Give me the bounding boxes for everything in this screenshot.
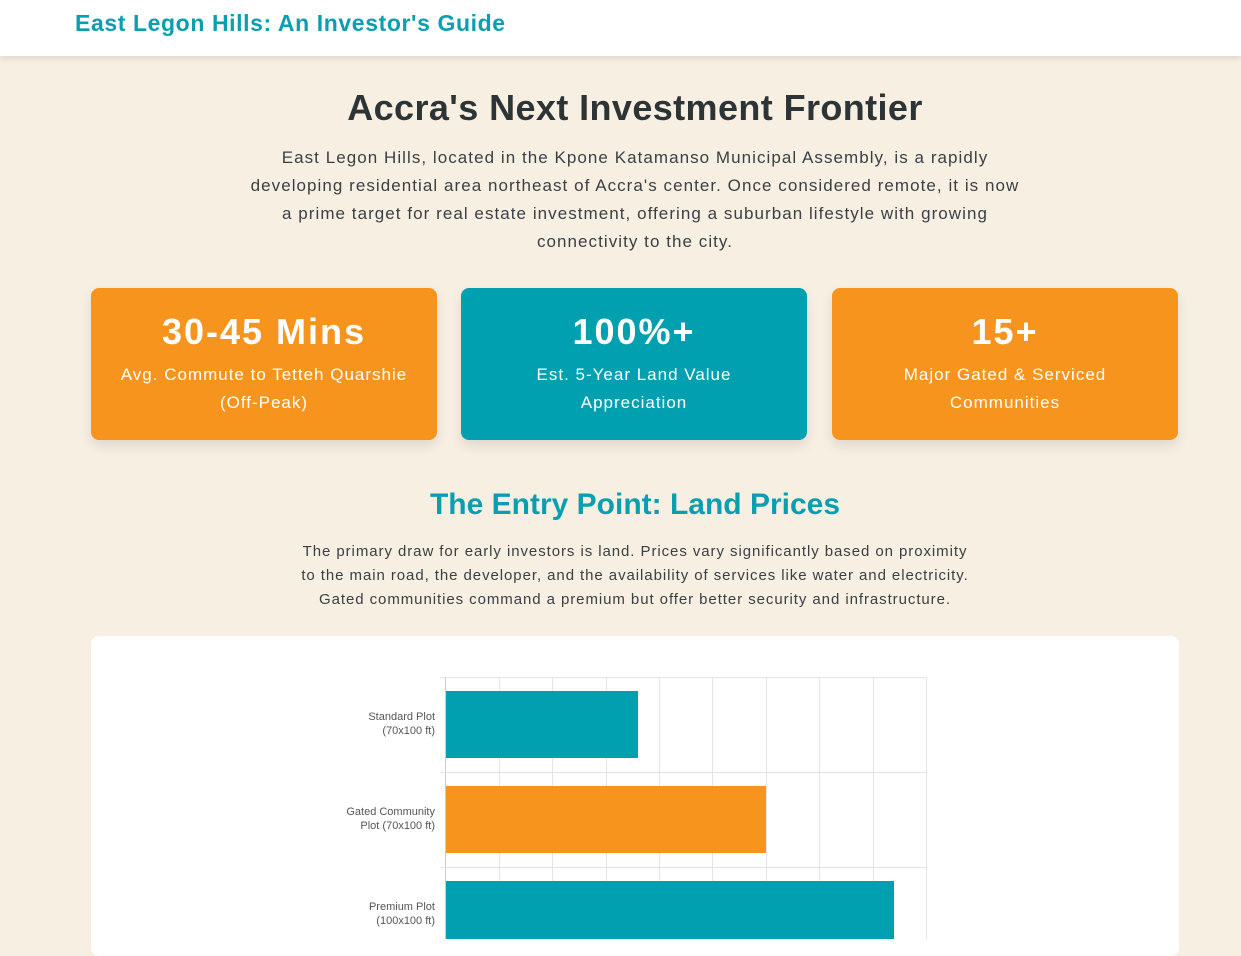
label: gated xyxy=(346,806,435,832)
section text: to the main road, the developer, and the availability of services like water and electricity. xyxy=(301,567,969,584)
label: standard xyxy=(368,711,435,737)
label: standard: Standard Plot xyxy=(368,711,435,723)
bar: standard plot xyxy=(446,691,638,758)
stat card: appreciation: Est. 5-Year Land Value xyxy=(537,365,731,384)
bar: premium plot xyxy=(446,881,894,939)
label: gated: Gated Community xyxy=(346,806,435,818)
header title: East Legon Hills: An Investor's Guide xyxy=(75,10,506,36)
bar: gated plot xyxy=(446,786,766,853)
intro text: a prime target for real estate investment, offering a suburban lifestyle with growing xyxy=(282,204,988,223)
label: premium: (100x100 ft) xyxy=(376,915,435,927)
header bar xyxy=(0,0,1241,56)
stat card: appreciation xyxy=(461,288,807,440)
section heading: land prices: The Entry Point: Land Prices xyxy=(430,488,840,521)
label: gated: Plot (70x100 ft) xyxy=(360,820,435,832)
stat card: communities: Major Gated & Serviced xyxy=(904,365,1106,384)
bar chart xyxy=(440,677,927,939)
stat card: commute: 30-45 Mins xyxy=(162,311,366,352)
intro text xyxy=(251,148,1019,251)
intro text: developing residential area northeast of Accra's center. Once considered remote, it is now xyxy=(251,176,1019,195)
label: premium xyxy=(369,901,435,927)
section text xyxy=(301,543,969,608)
stat card: communities: Communities xyxy=(950,393,1060,412)
label: premium: Premium Plot xyxy=(369,901,435,913)
stat card: appreciation: Appreciation xyxy=(581,393,687,412)
section text: Gated communities command a premium but offer better security and infrastructure. xyxy=(319,591,951,608)
intro text: East Legon Hills, located in the Kpone Katamanso Municipal Assembly, is a rapidly xyxy=(282,148,988,167)
stat card: communities xyxy=(832,288,1178,440)
stat card: commute: (Off-Peak) xyxy=(220,393,308,412)
chart panel xyxy=(91,636,1179,956)
section text: The primary draw for early investors is land. Prices vary significantly based on proximity xyxy=(303,543,967,560)
stat card: communities: 15+ xyxy=(971,311,1039,352)
main title: Accra's Next Investment Frontier xyxy=(347,87,923,128)
stat card: commute: Avg. Commute to Tetteh Quarshie xyxy=(121,365,407,384)
intro text: connectivity to the city. xyxy=(537,232,733,251)
label: standard: (70x100 ft) xyxy=(382,725,435,737)
stat card: appreciation: 100%+ xyxy=(572,311,696,352)
stat card: commute xyxy=(91,288,437,440)
